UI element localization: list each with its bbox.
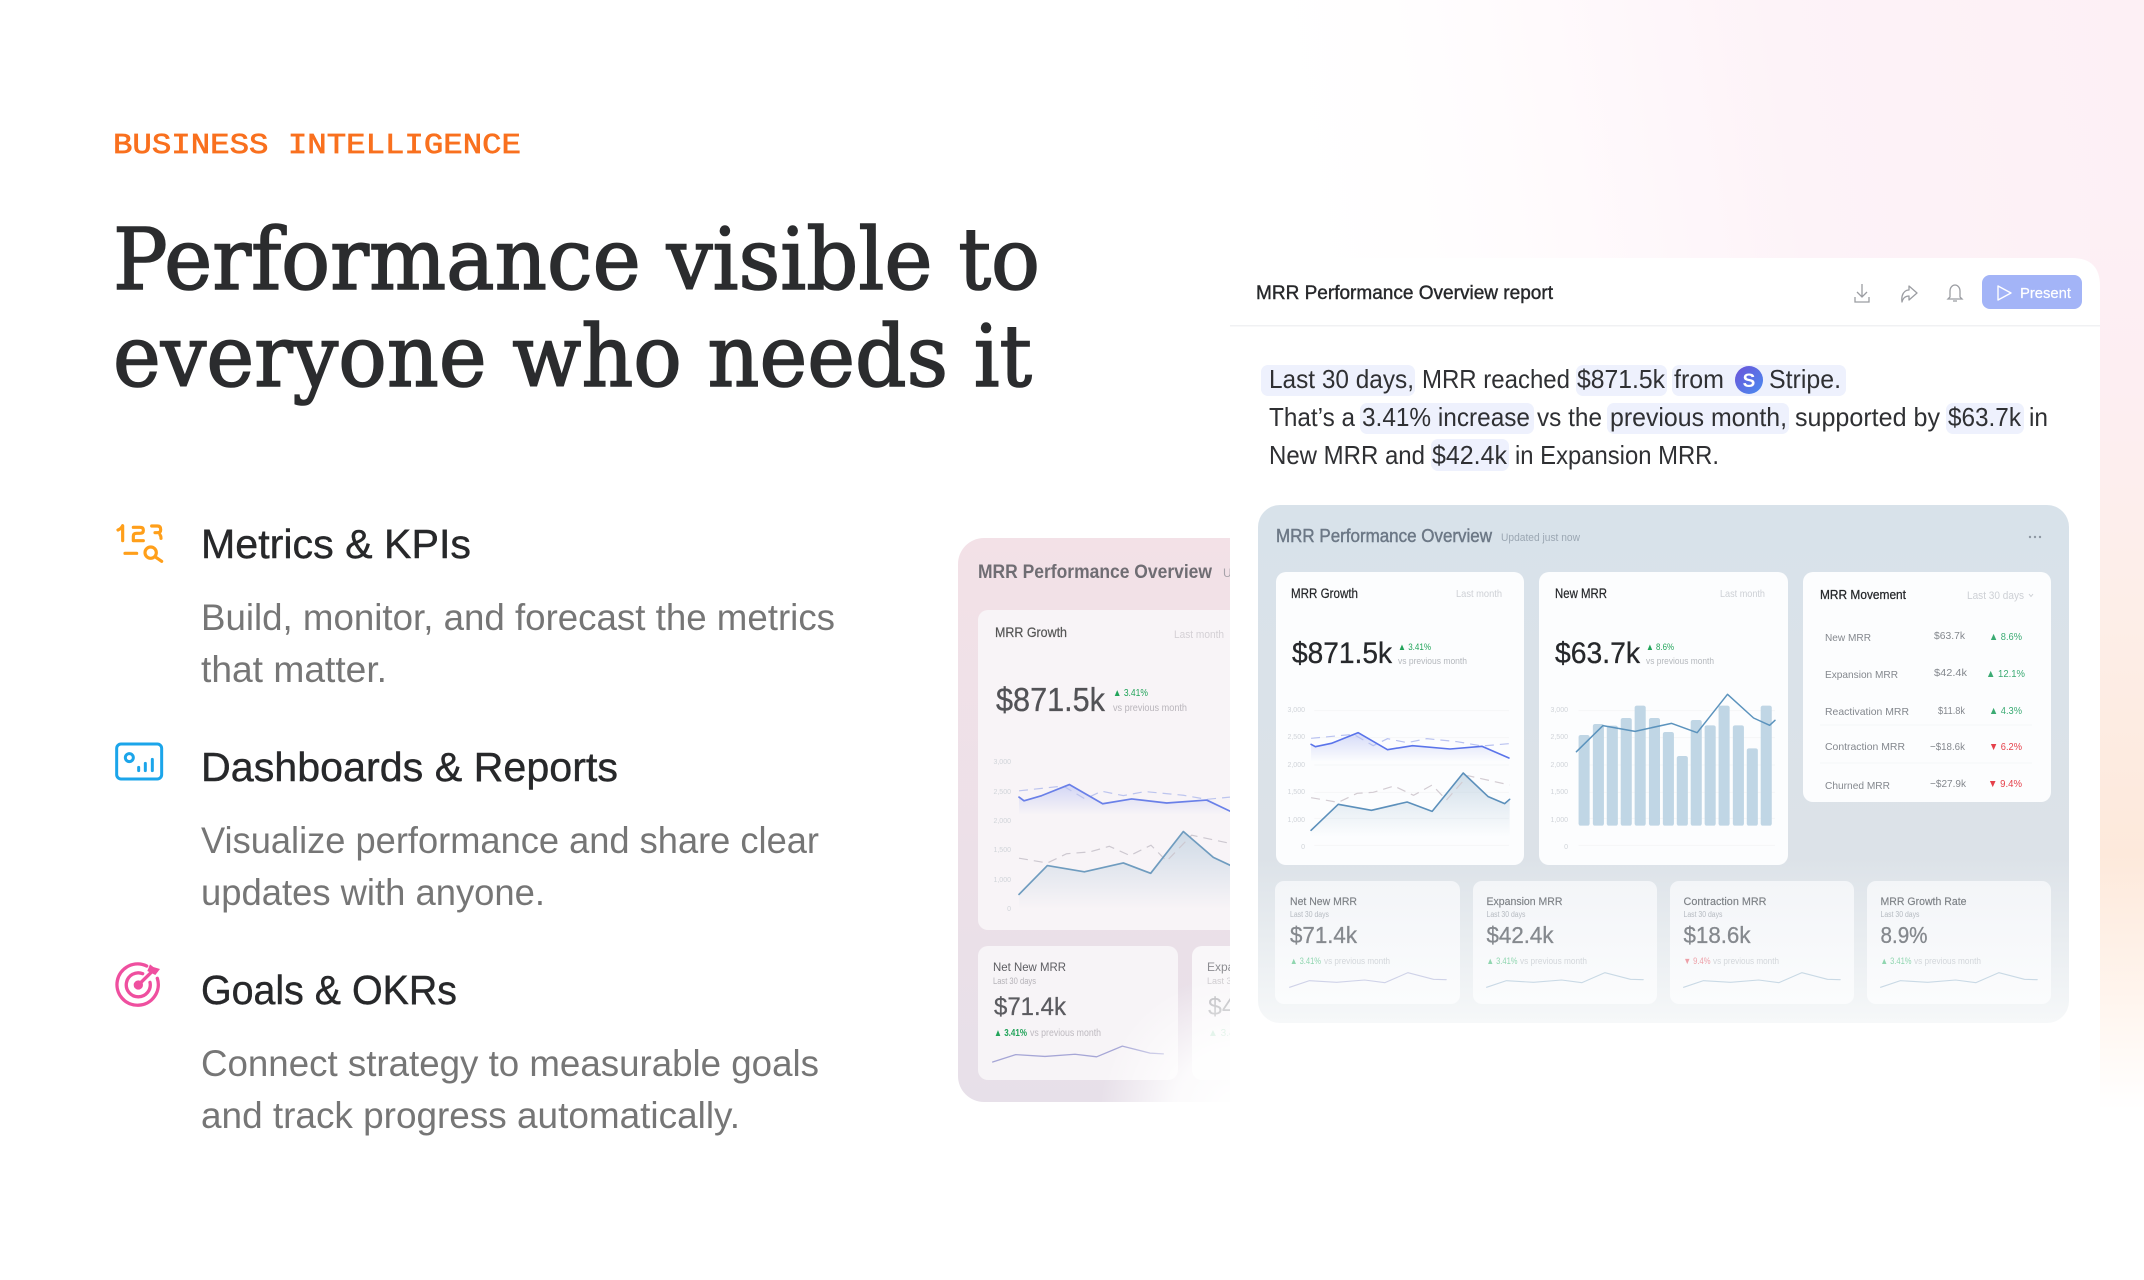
panel: background dashboard preview [958, 538, 1230, 1102]
card: MRR movement table: MRR Movement [1820, 587, 1906, 602]
card: MRR growth: vs previous month [1113, 703, 1187, 714]
chart axis: 3,000 [1550, 707, 1568, 714]
card: net new MRR [1275, 881, 1460, 1004]
card: MRR movement table [1803, 572, 2051, 802]
icon: 123 search [118, 526, 162, 561]
card: MRR growth: ▲ 3.41% [1398, 642, 1431, 653]
icon: stripe badge: S [1743, 371, 1755, 392]
chart axis: 1,000 [1550, 817, 1568, 824]
card: MRR growth: Last month [1174, 629, 1224, 641]
panel: dashboard [1258, 505, 2069, 1023]
card: MRR growth rate [1867, 881, 2051, 1004]
feature: metrics and KPIs [118, 521, 835, 690]
card: MRR growth [978, 610, 1230, 930]
description [201, 597, 835, 690]
chart axis: 2,500 [1287, 734, 1305, 741]
chart axis [993, 759, 1011, 913]
title: Performance visible to [113, 211, 1040, 310]
feature: dashboards and reports [117, 744, 819, 913]
card: MRR growth [1276, 572, 1524, 865]
card: MRR movement table: ▼ 9.4% [1988, 778, 2022, 790]
summary paragraph: That’s a [1269, 402, 1356, 432]
panel: main report [1230, 258, 2100, 1280]
present button [1982, 275, 2082, 309]
summary paragraph: vs the [1537, 402, 1602, 432]
card: new MRR: ▲ 8.6% [1646, 642, 1674, 653]
card: new MRR: vs previous month [1646, 656, 1714, 667]
card: expansion MRR: vs previous month [1520, 956, 1587, 966]
card: new MRR: Last month [1720, 588, 1765, 600]
card: new MRR [1539, 572, 1788, 865]
icon: dashboard [117, 744, 162, 779]
card: contraction MRR: Last 30 days [1684, 910, 1722, 919]
summary paragraph: previous month, [1610, 402, 1787, 432]
card: expansion MRR clipped: Last 30 [1207, 976, 1237, 986]
card: MRR movement table: −$27.9k [1930, 778, 1967, 790]
chart axis: 2,500 [993, 789, 1011, 796]
chart axis [1550, 707, 1568, 851]
card: MRR movement table: −$18.6k [1930, 741, 1966, 753]
card: net new MRR: ▲ 3.41% [1290, 956, 1321, 966]
card: expansion MRR clipped: Expansion [1207, 960, 1263, 974]
card: net new MRR: $71.4k [1290, 922, 1357, 948]
card: MRR growth: vs previous month [1398, 656, 1467, 667]
card: MRR growth: MRR Growth [1291, 586, 1358, 601]
title [113, 211, 1040, 407]
card: net new MRR: Net New MRR [993, 960, 1066, 974]
card: contraction MRR: $18.6k [1684, 922, 1751, 948]
description: and track progress automatically. [201, 1095, 740, 1136]
summary paragraph: in Expansion MRR. [1515, 440, 1719, 470]
line chart [1019, 785, 1230, 909]
summary paragraph: Stripe. [1769, 364, 1841, 394]
card: MRR growth rate: MRR Growth Rate [1880, 896, 1966, 908]
card: expansion MRR [1473, 881, 1657, 1004]
chart axis: 1,500 [993, 847, 1011, 854]
card: MRR movement table: Last 30 days [1967, 590, 2024, 602]
dashboard title: MRR Performance Overview [978, 562, 1212, 583]
card: expansion MRR: Last 30 days [1486, 910, 1526, 919]
card: MRR movement table: Contraction MRR [1825, 741, 1905, 753]
card: MRR growth rate: 8.9% [1880, 922, 1928, 948]
card: net new MRR: ▲ 3.41% [994, 1028, 1027, 1039]
card: MRR movement table: New MRR [1825, 632, 1871, 644]
chart axis: 2,500 [1550, 734, 1568, 741]
chart axis: 2,000 [1287, 762, 1305, 769]
icon: stripe badge [1735, 366, 1763, 394]
card: new MRR: $63.7k [1555, 637, 1641, 670]
card: net new MRR [978, 946, 1178, 1080]
card: MRR movement table: ▼ 6.2% [1989, 741, 2022, 753]
card: contraction MRR: vs previous month [1713, 956, 1779, 966]
icon: bell [1948, 285, 1962, 301]
summary paragraph: in [2029, 402, 2048, 432]
card: MRR movement table: ▲ 8.6% [1989, 631, 2022, 643]
chart axis: 2,000 [1550, 762, 1568, 769]
eyebrow label: BUSINESS INTELLIGENCE [113, 129, 521, 162]
card: expansion MRR: ▲ 3.41% [1486, 956, 1518, 966]
description: Connect strategy to measurable goals [201, 1043, 819, 1084]
bar chart [1576, 694, 1775, 845]
title: everyone who needs it [113, 308, 1032, 407]
chart axis: 1,500 [1550, 789, 1568, 796]
summary paragraph: Last 30 days, [1269, 364, 1414, 394]
card: net new MRR: Net New MRR [1290, 896, 1357, 908]
description: updates with anyone. [201, 872, 545, 913]
menu dots [2029, 536, 2041, 538]
chart axis: 0 [1564, 844, 1568, 851]
description: Build, monitor, and forecast the metrics [201, 597, 835, 638]
card: net new MRR: Last 30 days [1290, 910, 1329, 919]
card: MRR growth: ▲ 3.41% [1113, 688, 1148, 699]
card: MRR movement table: $42.4k [1934, 667, 1968, 679]
description [201, 820, 819, 913]
icon: download [1855, 284, 1869, 302]
icon: target [117, 964, 160, 1005]
summary paragraph: MRR reached [1422, 364, 1570, 394]
card: MRR growth rate: vs previous month [1914, 956, 1981, 966]
chart axis: 3,000 [993, 759, 1011, 766]
card: net new MRR: vs previous month [1324, 956, 1390, 966]
description [201, 1043, 819, 1136]
line chart [1311, 711, 1510, 845]
heading: Dashboards & Reports [201, 744, 618, 790]
heading: Metrics & KPIs [201, 521, 471, 567]
card: MRR movement table: Churned MRR [1825, 780, 1890, 792]
chart axis: 1,000 [993, 877, 1011, 884]
card: MRR growth rate: ▲ 3.41% [1880, 956, 1912, 966]
card: MRR growth: Last month [1456, 588, 1502, 600]
dashboard title: MRR Performance Overview [1276, 526, 1493, 546]
summary paragraph: $42.4k [1432, 440, 1508, 470]
chart axis: 3,000 [1287, 707, 1305, 714]
card: expansion MRR clipped [1192, 946, 1230, 1044]
card: MRR movement table: ▲ 4.3% [1989, 705, 2022, 717]
feature: goals and OKRs [117, 964, 819, 1136]
card: new MRR: New MRR [1555, 586, 1607, 601]
card: contraction MRR: ▼ 9.4% [1684, 956, 1710, 966]
summary paragraph: $63.7k [1948, 402, 2022, 432]
summary paragraph: New MRR and [1269, 440, 1425, 470]
card: contraction MRR [1670, 881, 1854, 1004]
summary paragraph: 3.41% increase [1362, 402, 1530, 432]
summary paragraph: supported by [1795, 402, 1940, 432]
card: expansion MRR clipped: $42.4k [1208, 993, 1284, 1021]
chart axis: 0 [1301, 844, 1305, 851]
icon: share [1902, 286, 1917, 302]
chart axis: 1,500 [1287, 789, 1305, 796]
summary paragraph: from [1674, 364, 1724, 394]
description: that matter. [201, 649, 387, 690]
card: expansion MRR: Expansion MRR [1486, 896, 1563, 908]
summary paragraph: $871.5k [1577, 364, 1666, 394]
chart axis: 1,000 [1287, 817, 1305, 824]
heading: Goals & OKRs [201, 967, 457, 1013]
panel: dashboard: Updated just now [1501, 532, 1580, 544]
card: expansion MRR clipped: ▲ 3.41% [1208, 1028, 1249, 1039]
card: MRR growth: MRR Growth [995, 624, 1067, 640]
card: net new MRR: vs previous month [1030, 1028, 1101, 1039]
summary paragraph [1261, 364, 2048, 471]
card: contraction MRR: Contraction MRR [1684, 896, 1767, 908]
panel: background dashboard preview: Updated [1223, 566, 1268, 580]
report title: MRR Performance Overview report [1256, 283, 1554, 304]
card: MRR movement table: $11.8k [1938, 705, 1966, 717]
card: MRR growth: $871.5k [996, 681, 1105, 718]
description: Visualize performance and share clear [201, 820, 819, 861]
card: MRR movement table: Reactivation MRR [1825, 706, 1909, 718]
card: MRR movement table: $63.7k [1934, 630, 1966, 642]
present button: Present [2020, 286, 2071, 302]
card: net new MRR: $71.4k [994, 993, 1066, 1021]
card: expansion MRR: $42.4k [1486, 922, 1554, 948]
card: MRR growth rate: Last 30 days [1880, 910, 1920, 919]
chart axis: 2,000 [993, 818, 1011, 825]
card: MRR movement table: Expansion MRR [1825, 669, 1898, 681]
chart axis: 0 [1007, 906, 1011, 913]
chart axis [1287, 707, 1305, 851]
report header [1230, 275, 2100, 326]
card: net new MRR: Last 30 days [993, 976, 1036, 986]
card: MRR growth: $871.5k [1292, 637, 1393, 670]
card: MRR movement table: ▲ 12.1% [1986, 668, 2025, 680]
